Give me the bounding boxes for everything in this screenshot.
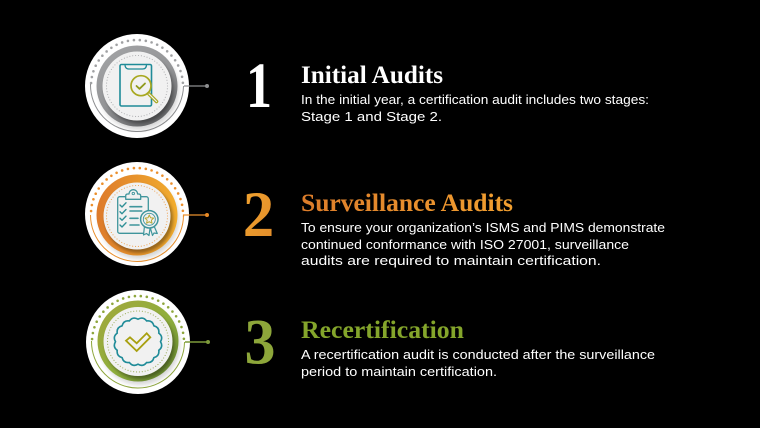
icon: clipboard with magnifier bbox=[120, 64, 156, 106]
text: initial audits description: In the initial year, a certification audit includes two stages: bbox=[301, 92, 649, 107]
number 1: 1 bbox=[246, 50, 272, 122]
step 2 badge bbox=[85, 162, 189, 266]
text: initial audits description bbox=[301, 92, 649, 124]
connector line 2 bbox=[184, 213, 209, 217]
connector line 1 bbox=[184, 84, 209, 88]
step 1 badge bbox=[85, 34, 189, 138]
text: recertification description bbox=[301, 347, 655, 379]
heading: surveillance audits: Surveillance Audits bbox=[301, 190, 513, 217]
text: recertification description: A recertification audit is conducted after the surveillance bbox=[301, 347, 655, 362]
text: surveillance audits description: audits are required to maintain certification. bbox=[301, 253, 601, 268]
step 3 badge bbox=[86, 290, 190, 394]
text: surveillance audits description bbox=[301, 220, 665, 268]
text: surveillance audits description: To ensure your organization’s ISMS and PIMS demonstrate bbox=[301, 220, 665, 235]
connector line 3 bbox=[185, 340, 210, 344]
text: surveillance audits description: continued conformance with ISO 27001, surveillance bbox=[301, 237, 629, 252]
text: recertification description: period to maintain certification. bbox=[301, 364, 497, 379]
icon: scalloped seal with check mark bbox=[114, 318, 162, 365]
icon: checklist with award ribbon bbox=[118, 190, 158, 236]
heading: recertification: Recertification bbox=[301, 317, 464, 344]
number 2: 2 bbox=[243, 179, 274, 251]
text: initial audits description: Stage 1 and Stage 2. bbox=[301, 109, 442, 124]
heading: initial audits: Initial Audits bbox=[301, 62, 443, 89]
number 3: 3 bbox=[244, 306, 276, 378]
